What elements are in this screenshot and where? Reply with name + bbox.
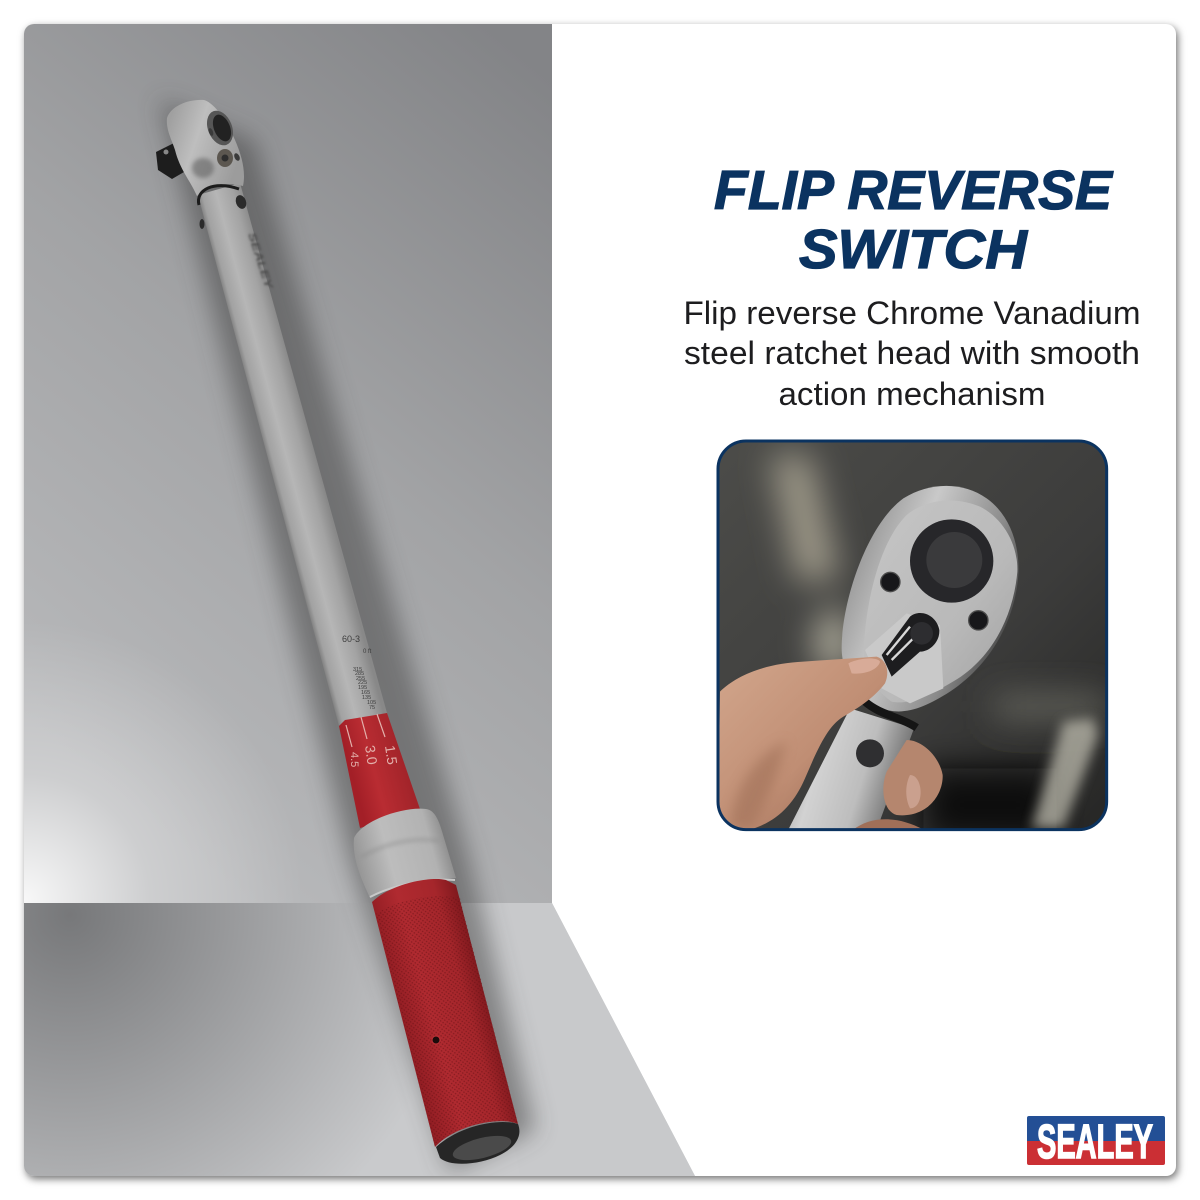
scale text on shaft: 75 [369, 705, 375, 711]
cap inner [450, 1131, 514, 1165]
thumbnail [848, 658, 880, 674]
black end cap [436, 1122, 519, 1164]
heading [714, 159, 1114, 280]
red grip [372, 879, 518, 1147]
head screws [881, 572, 988, 630]
ratchet head face [864, 500, 1017, 702]
red scale markings: 4.5 [348, 752, 360, 767]
torque wrench [156, 100, 535, 1172]
lower palm [855, 819, 921, 828]
red scale markings: 1.5 [382, 744, 401, 766]
description text [684, 295, 1140, 412]
shaft branding: SEALEY [245, 231, 275, 292]
photo border [718, 441, 1107, 830]
drive ring [910, 519, 993, 603]
scale text on shaft [342, 634, 376, 711]
scale text on shaft: 195 [358, 685, 367, 691]
black o-ring [865, 702, 917, 728]
scale text on shaft: 105 [367, 700, 376, 706]
scale text on shaft: 0 ft [363, 649, 372, 655]
scale text on shaft: 225 [358, 680, 367, 686]
grip hole [432, 1036, 440, 1044]
thumb and hand [718, 657, 887, 830]
red scale markings [346, 714, 401, 767]
left scene panel [24, 24, 695, 1176]
collar [354, 809, 456, 898]
drive cap [926, 532, 982, 588]
black ring [198, 186, 239, 205]
heading: SWITCH [799, 218, 1028, 280]
square drive [156, 143, 184, 179]
lower finger [883, 740, 943, 815]
ratchet head [167, 100, 244, 196]
flip switch [882, 613, 939, 677]
handle [788, 708, 914, 830]
thumb shading [730, 742, 787, 830]
collar edge [370, 880, 455, 897]
shaft [198, 183, 387, 726]
finger nail lower [906, 775, 921, 808]
collar highlight [361, 840, 439, 857]
description text: steel ratchet head with smooth [684, 335, 1140, 371]
head neck shading [192, 158, 214, 178]
heading: FLIP REVERSE [714, 159, 1114, 221]
logo blue band [1027, 1116, 1165, 1141]
red scale bar [339, 713, 421, 828]
photo: hand flipping ratchet switch [718, 441, 1107, 842]
scale text on shaft: 315 [353, 667, 362, 673]
scale text on shaft: 135 [362, 695, 371, 701]
description text: Flip reverse Chrome Vanadium [684, 295, 1140, 331]
background light streak [1032, 718, 1098, 828]
blurred background shapes [770, 455, 1107, 842]
selector recess [865, 613, 943, 703]
handle button [856, 739, 884, 767]
red scale markings: 3.0 [362, 744, 381, 766]
scale text on shaft: 60-3 [342, 634, 360, 644]
scale text on shaft: 285 [355, 671, 364, 677]
SEALEY logo [1027, 1116, 1165, 1169]
description text: action mechanism [778, 376, 1046, 412]
scale text on shaft: 255 [356, 676, 365, 682]
logo red band [1027, 1141, 1165, 1165]
ratchet head details [202, 107, 241, 167]
shaft side buttons [200, 194, 248, 229]
wrench shadow [160, 100, 535, 1172]
ratchet head outer [842, 486, 1019, 711]
scale text on shaft: 165 [361, 690, 370, 696]
